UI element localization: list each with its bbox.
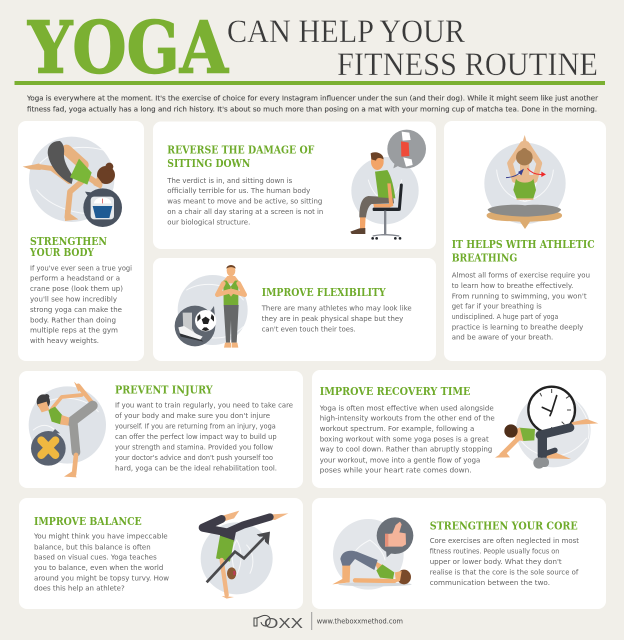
- body text: From running to swimming, you won't: [452, 291, 587, 300]
- body text: workout spectrum. For example, following a: [320, 424, 474, 433]
- body text: [430, 536, 579, 587]
- heading: SITTING DOWN: [167, 156, 251, 170]
- body text: body. Rather than doing: [30, 315, 116, 324]
- body text: undisciplined. A huge part of yoga: [452, 312, 558, 321]
- title: YOGA: [27, 6, 229, 90]
- panel: improve balance: [19, 498, 303, 609]
- body text: communication between the two.: [430, 578, 550, 587]
- body text: strong yoga can make the: [30, 305, 123, 314]
- body text: way to cool down. Rather than abruptly stopping: [320, 445, 492, 454]
- body text: perform a headstand or a: [30, 274, 120, 283]
- body text: Almost all forms of exercise require you: [452, 271, 590, 280]
- icon: handstand with rising arrow: [201, 511, 288, 599]
- icon: crane pose with scales: [23, 137, 122, 227]
- body text: hard, yoga can be the ideal rehabilitation tool.: [115, 463, 277, 472]
- body text: was meant to move and be active, so sitting: [167, 196, 322, 205]
- body text: fitness routines. People usually focus on: [430, 546, 559, 555]
- body text: you to balance, even when the world: [34, 563, 163, 572]
- heading: IMPROVE RECOVERY TIME: [320, 384, 471, 398]
- body text: high-intensity workouts from the other end of the: [320, 414, 495, 423]
- body text: does this help an athlete?: [34, 584, 125, 593]
- body text: practice is learning to breathe deeply: [452, 322, 584, 331]
- icon: bridge pose with thumbs up: [332, 517, 413, 590]
- body text: our biological structure.: [167, 217, 250, 226]
- panel: improve recovery time: [312, 370, 606, 488]
- body text: [166, 176, 323, 226]
- heading: REVERSE THE DAMAGE OF: [167, 142, 315, 156]
- icon: clock and roller pose: [495, 387, 598, 469]
- icon: standing man with football boot: [175, 265, 248, 348]
- heading: IMPROVE FLEXIBILITY: [262, 285, 386, 299]
- body text: around you might be topsy turvy. How: [34, 573, 169, 582]
- heading: [167, 142, 315, 170]
- body text: your strength and stamina. Provided you follow: [115, 443, 273, 452]
- body text: they are in peak physical shape but they: [262, 314, 404, 323]
- body text: The verdict is in, and sitting down is: [166, 176, 293, 185]
- body text: with heavy weights.: [30, 336, 99, 345]
- body text: and be aware of your breath.: [452, 333, 553, 342]
- body text: can offer the perfect low impact way to build up: [115, 432, 277, 441]
- body text: officially terrible for us. The human body: [167, 186, 311, 195]
- body text: you'll see how incredibly: [30, 294, 118, 304]
- title: CAN HELP YOUR: [227, 14, 465, 50]
- icon: dancer pose with plaster: [29, 382, 106, 477]
- heading: YOUR BODY: [29, 245, 95, 259]
- body text: [115, 401, 294, 472]
- heading: STRENGTHEN YOUR CORE: [430, 519, 578, 533]
- body text: [33, 532, 169, 593]
- body text: realise is that the core is the sole source of: [430, 567, 579, 576]
- body text: on a chair all day staring at a screen is not in: [167, 207, 323, 216]
- body text: [261, 304, 412, 333]
- body text: You might think you have impeccable: [33, 532, 168, 541]
- intro text: fitness fad, yoga actually has a long and rich history. It's about so much more than posing on a mat with your morning cup of matcha tea. Done in the morning.: [27, 104, 597, 114]
- body text: [30, 263, 132, 345]
- heading: [452, 237, 595, 265]
- title: FITNESS ROUTINE: [337, 47, 598, 83]
- body text: There are many athletes who may look like: [261, 304, 412, 313]
- intro text: Yoga is everywhere at the moment. It's the exercise of choice for every Instagram influencer under the sun (and their dog). While it might seem like just another: [26, 94, 598, 102]
- body text: [452, 271, 590, 342]
- body text: Yoga is often most effective when used alongside: [319, 403, 494, 412]
- icon: seated meditation with breath arrows: [484, 135, 566, 229]
- body text: If you want to train regularly, you need to take care: [115, 401, 294, 410]
- body text: yourself. If you are returning from an injury, yoga: [115, 422, 276, 431]
- body text: get far if your breathing is: [452, 302, 542, 311]
- panel: athletic breathing: [444, 121, 606, 361]
- body text: can't even touch their toes.: [262, 324, 356, 333]
- heading: PREVENT INJURY: [115, 382, 213, 396]
- panel: prevent injury: [19, 371, 303, 488]
- body text: boxing workout with some yoga poses is a great: [320, 434, 489, 443]
- body text: If you've ever seen a true yogi: [30, 263, 132, 272]
- body text: [319, 403, 495, 475]
- body text: poses while your heart rate comes down.: [320, 466, 472, 475]
- body text: Core exercises are often neglected in most: [430, 536, 579, 545]
- panel: reverse the damage of sitting down: [153, 122, 436, 249]
- body text: multiple reps at the gym: [30, 326, 118, 335]
- body text: balance, but this balance is often: [34, 542, 151, 551]
- intro text: [26, 94, 598, 114]
- heading: STRENGTHEN: [30, 234, 107, 248]
- title: [27, 6, 598, 90]
- heading: BREATHING: [452, 251, 517, 265]
- body text: to learn how to breathe effectively.: [452, 281, 573, 290]
- body text: crane pose (look them up): [30, 284, 123, 293]
- body text: based on visual cues. Yoga teaches: [34, 553, 157, 562]
- heading: IT HELPS WITH ATHLETIC: [452, 237, 595, 251]
- body text: your doctor's advice and don't push yourself too: [115, 453, 273, 462]
- body text: of your body and make sure you don't injure: [115, 411, 271, 420]
- body text: upper or lower body. What they don't: [430, 557, 562, 566]
- heading: IMPROVE BALANCE: [34, 514, 142, 528]
- body text: your workout, move into a gentle flow of yoga: [320, 455, 480, 464]
- footer url: www.theboxxmethod.com: [317, 616, 403, 625]
- panel: improve flexibility: [153, 258, 436, 361]
- footer logo: OXX: [264, 616, 303, 632]
- heading: [29, 234, 107, 259]
- panel: strengthen your body: [18, 121, 144, 361]
- footer logo: [254, 615, 303, 632]
- panel: strengthen your core: [312, 498, 606, 609]
- icon: seated man with spine bubble: [350, 130, 426, 240]
